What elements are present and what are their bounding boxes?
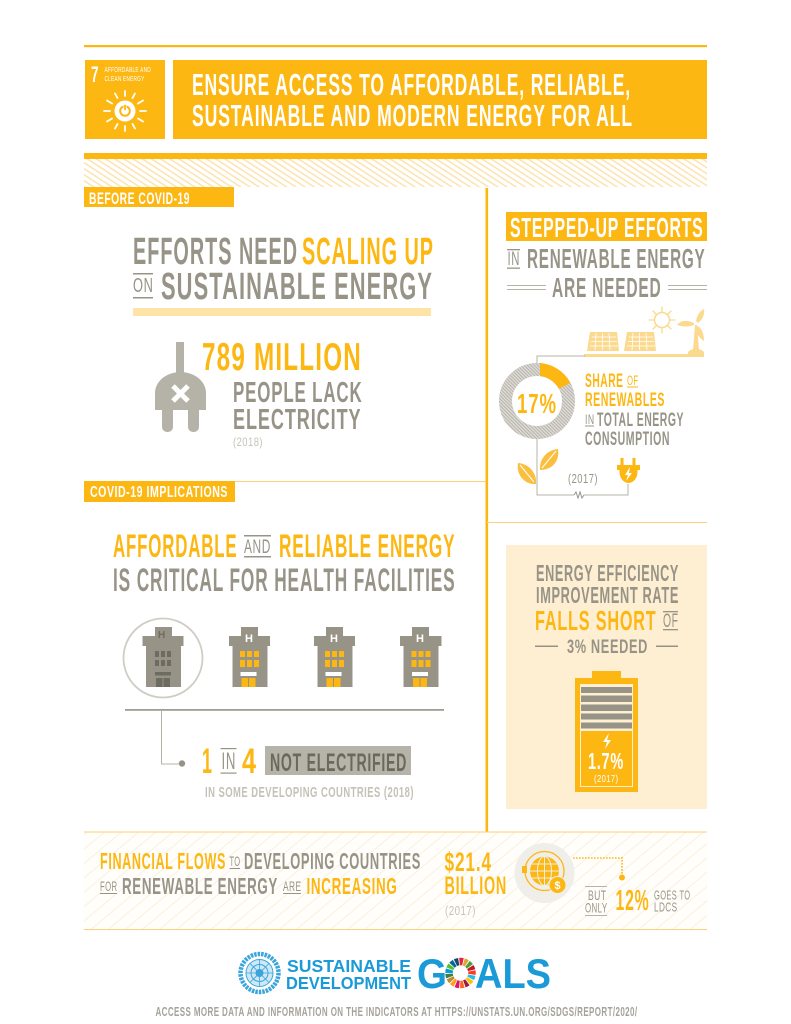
icon: battery 1.7 percent: (2017) [594,774,618,785]
text: share of renewables [585,371,684,450]
heading: affordable and reliable energy: AFFORDABLE [113,528,238,564]
dotted connector [573,858,625,880]
heading: financial flows: INCREASING [306,873,398,899]
text: share of renewables: CONSUMPTION [585,429,670,450]
icon: unplugged plug [155,342,206,432]
text: share of renewables: TOTAL ENERGY [597,410,684,431]
stat: 1 in 4 not electrified: NOT ELECTRIFIED [270,749,407,777]
stat: 21.4 billion [444,847,507,918]
goal 7 badge: CLEAN ENERGY [104,76,144,83]
text: share of renewables: IN [585,411,594,427]
logo: sustainable development goals: SUSTAINABLE [287,956,411,976]
icon: powered hospital 4: H [416,633,424,645]
title banner [173,60,707,139]
heading: efforts need scaling up: ON [133,275,154,297]
stat: but only 12 percent: ONLY [585,900,608,916]
logo: sustainable development goals [240,950,551,997]
donut chart: 17 percent: 17% [517,388,557,419]
stat: 789 million: 789 MILLION [202,336,362,379]
thick rule with hatched band [84,153,707,187]
icon: battery 1.7 percent [575,671,638,792]
stat: 21.4 billion: $21.4 [444,847,492,877]
heading: financial flows: FOR [100,878,118,894]
logo: sustainable development goals: DEVELOPMENT [286,973,411,993]
highlight bar [133,308,431,316]
heading: efforts need scaling up: EFFORTS NEED [133,231,298,273]
heading: financial flows: ARE [283,878,302,894]
ground line and connector [125,709,444,767]
heading: financial flows: TO [230,853,240,869]
heading: stepped-up efforts: ARE NEEDED [552,272,662,303]
stat: 21.4 billion: BILLION [444,872,507,900]
heading: affordable and reliable energy: AND [244,537,271,558]
stat: 1 in 4 not electrified: IN [222,748,236,775]
heading: affordable and reliable energy: RELIABLE ENERGY [279,528,456,564]
goal 7 badge: AFFORDABLE AND [104,67,151,74]
label: covid implications: COVID-19 IMPLICATIONS [90,484,228,501]
stat: 789 million [202,336,362,449]
stat: 789 million: PEOPLE LACK [233,377,362,409]
icon: battery 1.7 percent: 1.7% [588,748,624,774]
heading: financial flows [100,848,421,899]
heading: affordable and reliable energy: IS CRITICAL FOR HEALTH FACILITIES [113,562,456,598]
heading: stepped-up efforts [506,212,707,303]
heading: stepped-up efforts: IN [508,249,520,270]
stat: but only 12 percent: LDCS [654,900,678,914]
stat: but only 12 percent: GOES TO [654,888,690,902]
stat: but only 12 percent [585,885,690,917]
label: before covid: BEFORE COVID-19 [89,189,190,208]
text: 2017: (2017) [568,471,598,486]
icon: powered hospital 4 [400,627,442,687]
panel: energy efficiency: ENERGY EFFICIENCY [536,560,679,586]
stat: 1 in 4 not electrified: 4 [242,742,256,781]
resistor symbol [574,492,584,498]
heading: financial flows: RENEWABLE ENERGY [122,873,278,899]
donut chart: 17 percent [506,363,570,432]
section divider left [84,481,486,482]
icon: globe with dollar coin: $ [554,880,561,892]
icon: power plug with bolt [617,458,640,483]
logo: sustainable development goals: ALS [475,950,551,997]
text: share of renewables: RENEWABLES [585,390,665,411]
stat: but only 12 percent: BUT [588,887,606,903]
section divider right [487,522,707,523]
stat: 1 in 4 not electrified [202,742,414,801]
icon: unpowered hospital in circle: H [158,630,165,641]
icon: UN emblem [240,954,278,992]
heading: efforts need scaling up [133,231,434,308]
label: covid implications [84,481,235,502]
icon: solar panels, sun and wind turbine [584,307,704,357]
stat: 789 million: ELECTRICITY [233,404,362,436]
heading: financial flows: FINANCIAL FLOWS [100,848,226,874]
panel: financial flows band [84,832,707,930]
icon: powered hospital 2 [229,627,270,687]
text: share of renewables: OF [627,372,638,388]
icon: SDG colour wheel [443,955,478,991]
icon: globe with dollar coin [514,843,574,903]
top rule [84,45,707,47]
stat: 21.4 billion: (2017) [445,903,476,918]
heading: efforts need scaling up: SUSTAINABLE ENERGY [161,266,433,308]
icon: powered hospital 3 [314,627,355,687]
logo: sustainable development goals: G [417,950,447,997]
heading: financial flows: DEVELOPING COUNTRIES [244,848,421,874]
heading: efforts need scaling up: SCALING UP [302,231,434,273]
goal 7 badge: 7 [91,62,98,87]
stat: 789 million: (2018) [233,435,263,449]
stat: 1 in 4 not electrified: IN SOME DEVELOPING COUNTRIES (2018) [205,785,414,801]
heading: affordable and reliable energy [113,528,456,598]
panel: energy efficiency: 3% NEEDED [567,637,648,658]
icon: powered hospital 2: H [245,633,253,645]
central vertical divider [486,188,488,832]
circuit line connecting panels, donut, plug [537,356,628,495]
panel: energy efficiency [506,545,707,809]
icon: unpowered hospital in circle [124,618,202,698]
text: share of renewables: SHARE [585,371,624,392]
panel: energy efficiency: FALLS SHORT [535,605,656,636]
goal 7 badge [85,60,165,139]
stat: 1 in 4 not electrified: 1 [202,742,212,781]
icon: sun with power symbol [104,91,146,131]
panel: energy efficiency: IMPROVEMENT RATE [536,582,679,608]
panel: energy efficiency: OF [663,611,678,632]
stat: but only 12 percent: 12% [616,885,650,917]
icon: powered hospital 3: H [330,633,338,645]
icon: leaves [518,449,558,484]
